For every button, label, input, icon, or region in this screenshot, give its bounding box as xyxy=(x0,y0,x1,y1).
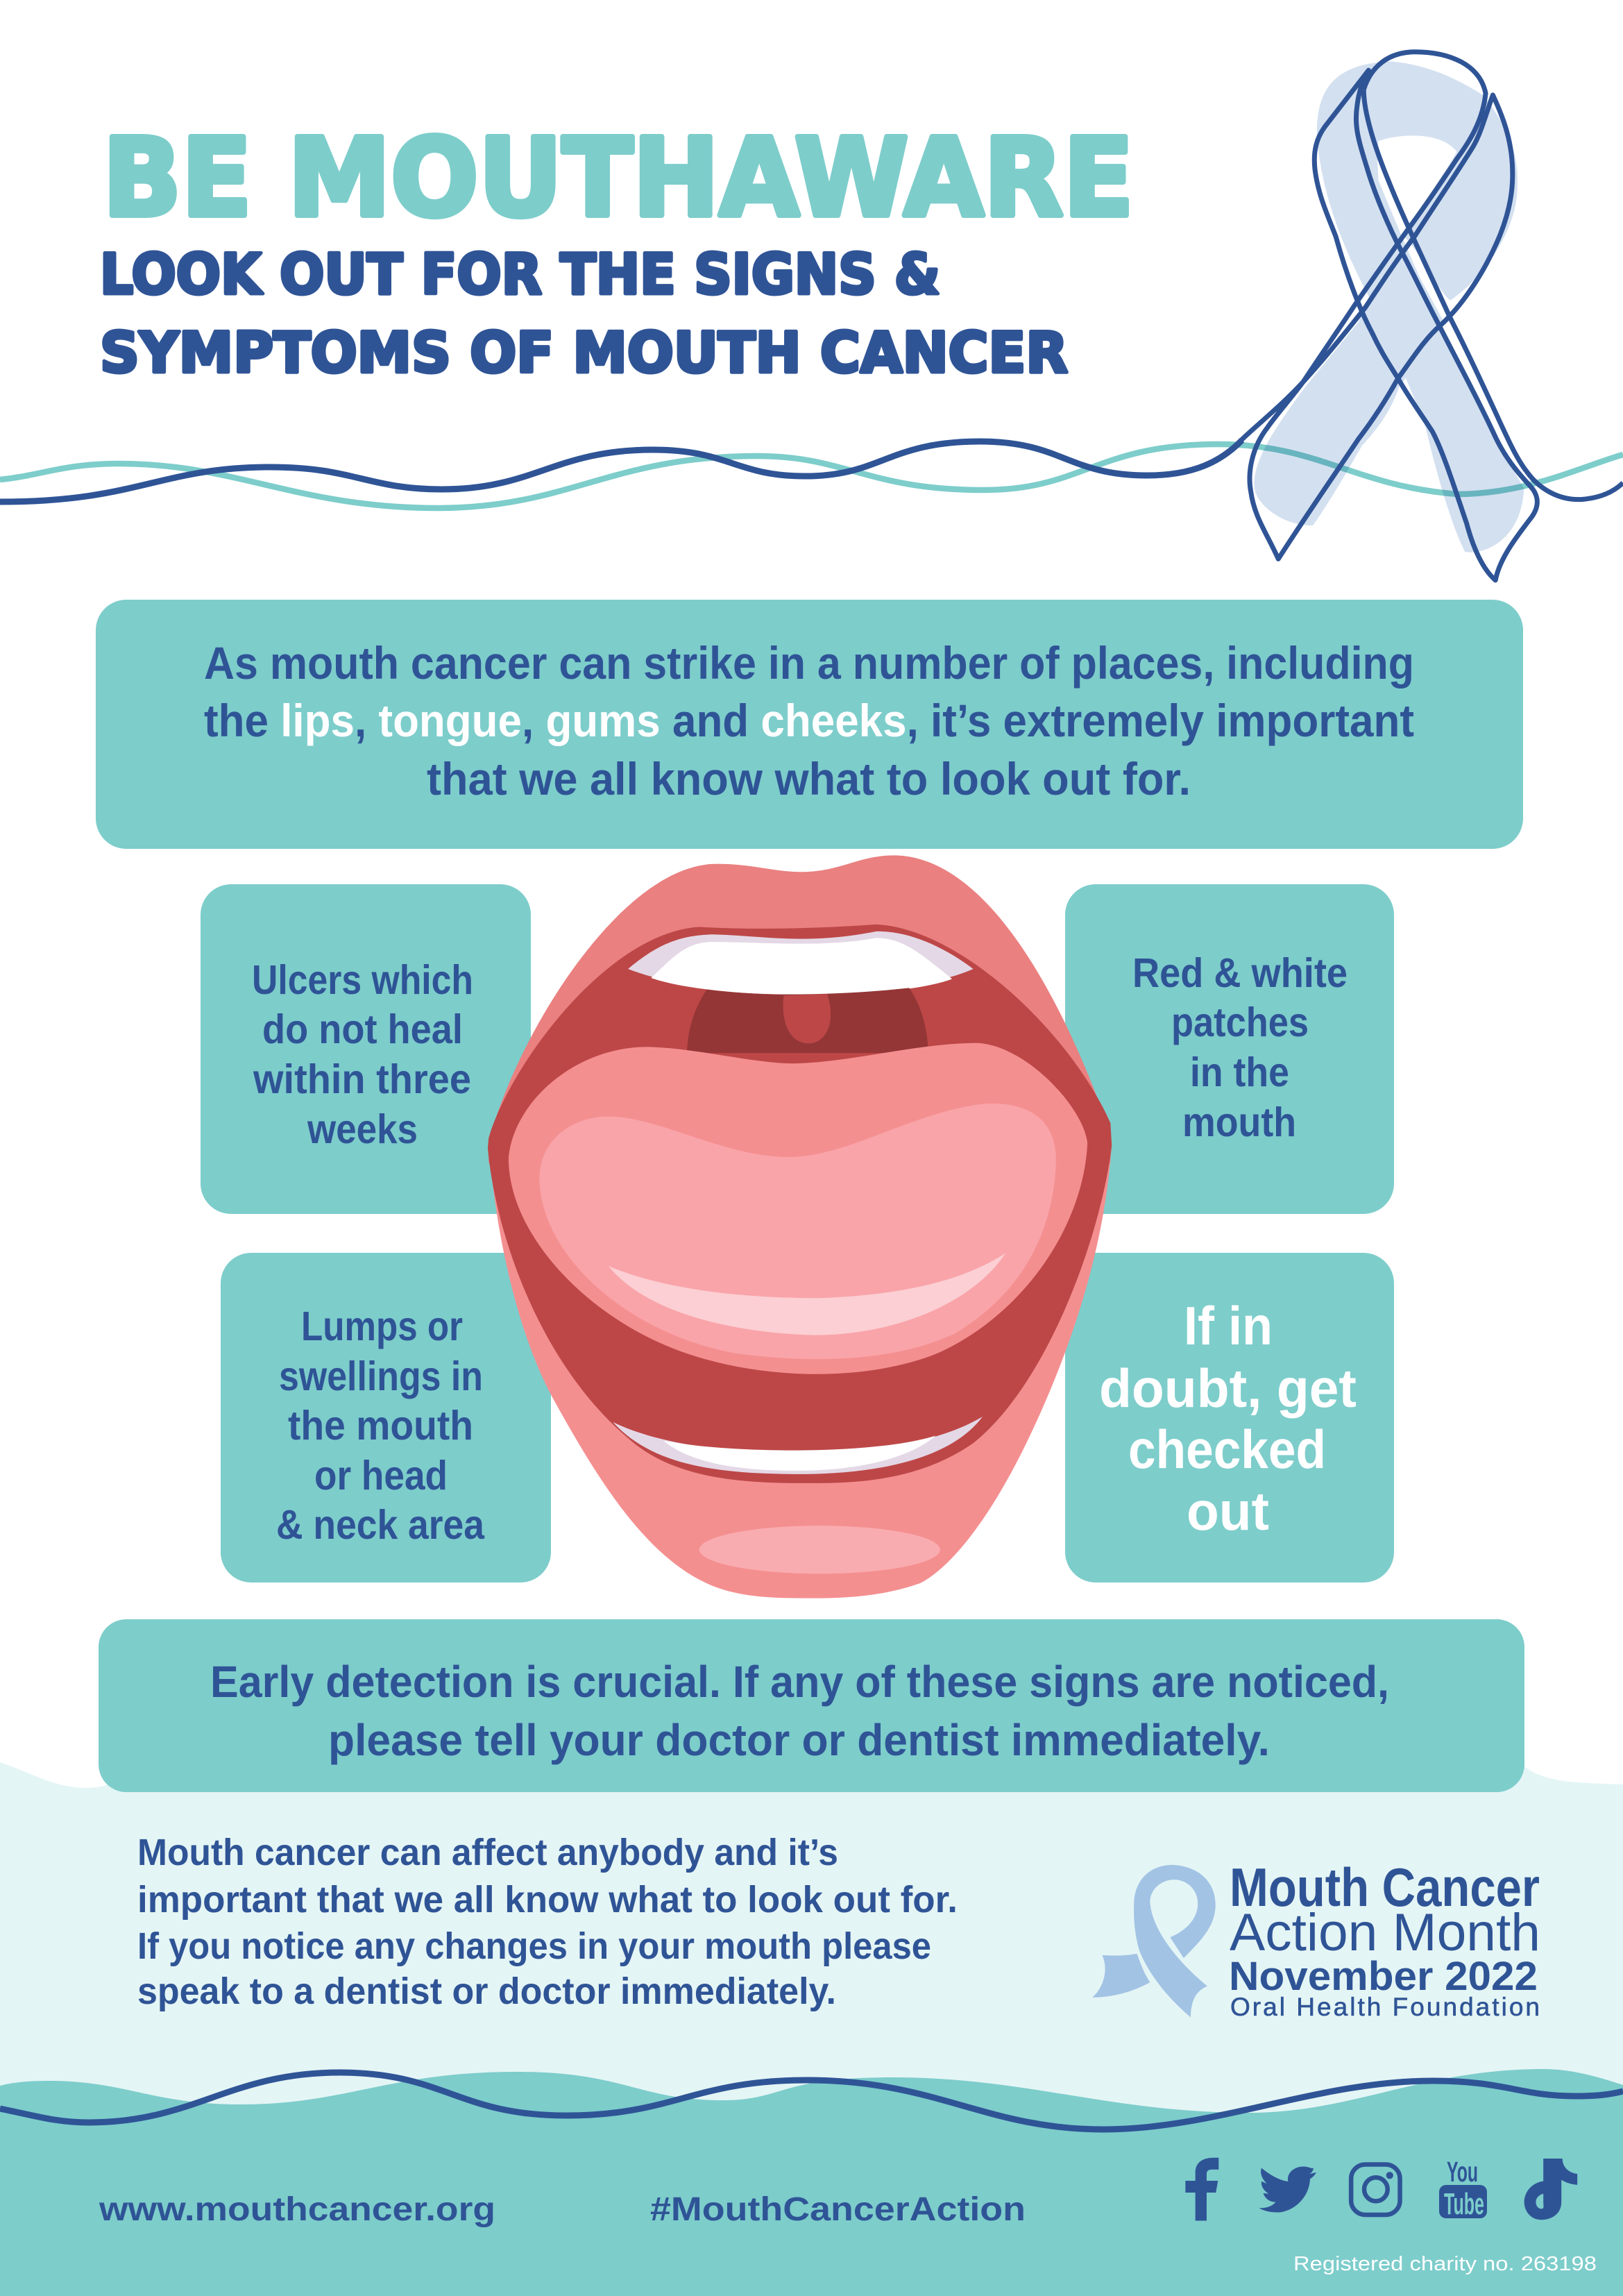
intro text xyxy=(204,637,1414,804)
upper lip xyxy=(488,855,1110,1163)
light footer background xyxy=(0,1762,1623,2117)
icon: awareness ribbon xyxy=(1241,52,1623,580)
icon: logo ribbon xyxy=(1092,1865,1216,2017)
subtitle xyxy=(100,242,1068,385)
panel: ulcers: Ulcers which xyxy=(252,957,473,1003)
panel: patches xyxy=(1065,884,1394,1214)
lower lip xyxy=(488,1143,1112,1598)
panel: intro xyxy=(96,600,1523,849)
title: BE MOUTHAWARE xyxy=(103,115,1134,241)
panel: patches: in the xyxy=(1190,1049,1289,1095)
panel: lumps: & neck area xyxy=(276,1502,485,1548)
panel: lumps: swellings in xyxy=(279,1353,483,1399)
panel: get checked xyxy=(1065,1253,1394,1582)
icon: twitter xyxy=(1259,2166,1316,2213)
panel: get checked: doubt, get xyxy=(1099,1358,1357,1419)
footer band xyxy=(0,2069,1623,2296)
logo: Mouth Cancer Action Month: Oral Health Foundation xyxy=(1230,1993,1540,2021)
logo: Mouth Cancer Action Month xyxy=(1092,1857,1540,2021)
mouth interior xyxy=(488,925,1112,1483)
panel: patches: mouth xyxy=(1182,1099,1296,1145)
logo: Mouth Cancer Action Month: November 2022 xyxy=(1229,1954,1538,1999)
logo: Mouth Cancer Action Month: Mouth Cancer xyxy=(1230,1857,1540,1918)
icon: instagram xyxy=(1351,2165,1400,2215)
panel: early detection: Early detection is crucial. If any of these signs are noticed, xyxy=(210,1657,1389,1707)
illustration: open mouth xyxy=(488,855,1112,1598)
ribbon outlines xyxy=(1241,52,1623,580)
panel: patches: Red & white xyxy=(1132,950,1348,996)
panel: lumps: the mouth xyxy=(288,1403,473,1449)
panel: early detection: please tell your doctor or dentist immediately. xyxy=(328,1715,1270,1765)
subtitle: LOOK OUT FOR THE SIGNS & xyxy=(100,242,940,307)
panel: early detection xyxy=(99,1619,1524,1792)
icon: youtube xyxy=(1439,2156,1487,2221)
panel: get checked: checked xyxy=(1128,1419,1326,1480)
panel: lumps: or head xyxy=(314,1453,448,1499)
panel: patches: patches xyxy=(1171,999,1309,1045)
panel: lumps xyxy=(221,1253,551,1582)
panel: get checked: out xyxy=(1187,1480,1269,1542)
blue wave line xyxy=(0,440,1242,502)
text block: anybody can be affected: important that we all know what to look out for. xyxy=(137,1879,958,1921)
icon: tiktok xyxy=(1524,2159,1577,2220)
text block: anybody can be affected xyxy=(137,1832,958,2012)
panel: ulcers: weeks xyxy=(307,1106,418,1152)
teal wave line xyxy=(0,444,1623,508)
text block: anybody can be affected: speak to a dentist or doctor immediately. xyxy=(137,1970,836,2012)
panel: ulcers: do not heal xyxy=(262,1006,463,1052)
panel: ulcers xyxy=(201,884,531,1214)
footer blue wave line xyxy=(0,2073,1623,2129)
intro text: that we all know what to look out for. xyxy=(427,753,1191,804)
icon: youtube: Tube xyxy=(1444,2187,1484,2221)
website: www.mouthcancer.org xyxy=(99,2191,495,2228)
intro text: As mouth cancer can strike in a number of places, including xyxy=(204,637,1414,689)
lower teeth xyxy=(613,1417,983,1474)
tongue xyxy=(509,1043,1087,1374)
upper teeth xyxy=(628,931,974,995)
logo: Mouth Cancer Action Month: Action Month xyxy=(1230,1903,1540,1962)
icon: youtube: You xyxy=(1447,2156,1478,2188)
intro text: the lips, tongue, gums and cheeks, it’s extremely important xyxy=(204,695,1414,746)
hashtag: #MouthCancerAction xyxy=(650,2191,1026,2228)
panel: lumps: Lumps or xyxy=(301,1303,463,1349)
icon: facebook xyxy=(1185,2158,1218,2220)
ribbon fill xyxy=(1254,61,1524,552)
charity number: Registered charity no. 263198 xyxy=(1293,2253,1597,2275)
text block: anybody can be affected: Mouth cancer can affect anybody and it’s xyxy=(137,1832,838,1873)
panel: get checked: If in xyxy=(1184,1295,1273,1356)
lower lip highlight xyxy=(699,1526,940,1573)
subtitle: SYMPTOMS OF MOUTH CANCER xyxy=(100,321,1068,385)
palate and uvula xyxy=(687,988,928,1053)
panel: ulcers: within three xyxy=(253,1056,471,1102)
text block: anybody can be affected: If you notice any changes in your mouth please xyxy=(137,1925,931,1967)
